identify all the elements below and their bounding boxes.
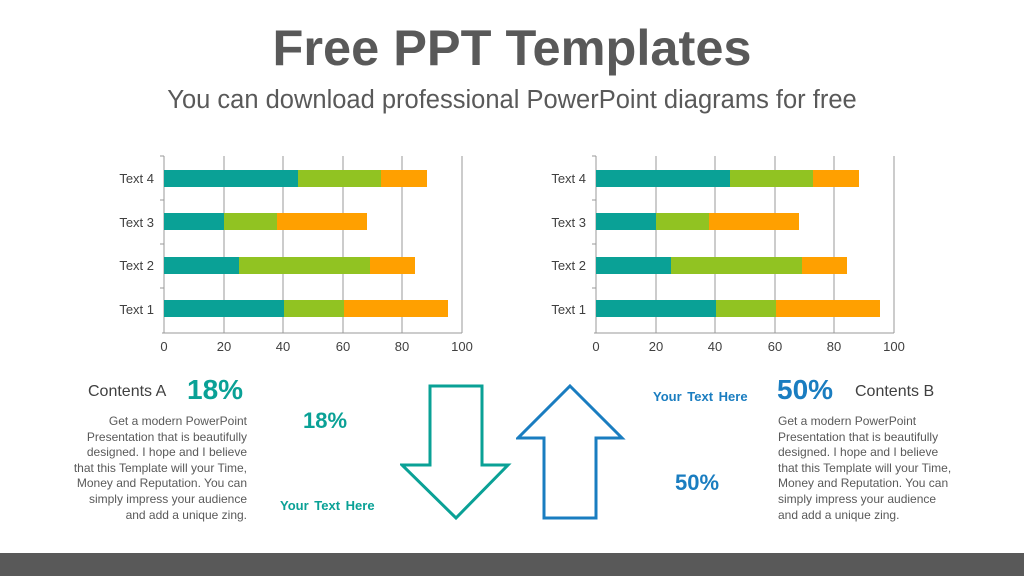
left bar chart: 0 <box>160 339 168 354</box>
left bar chart: Text 1 <box>119 302 154 317</box>
left bar chart: Text 3 <box>119 215 154 230</box>
right bar chart: Text 4 <box>551 171 586 186</box>
right bar chart: Text 1 <box>551 302 586 317</box>
label 50%: 50% <box>675 470 719 495</box>
right bar chart: 80 <box>827 339 841 354</box>
label Your Text Here right: Your Text Here <box>653 389 748 404</box>
right bar chart <box>551 156 905 354</box>
left bar chart: 20 <box>217 339 231 354</box>
percent B: 50% <box>777 374 833 405</box>
right bar chart: 20 <box>649 339 663 354</box>
percent A: 18% <box>187 374 243 405</box>
text block A: Get a modern PowerPoint Presentation that is beautifully designed. I hope and I believe that this Template will your Time, Money and Reputation. You can simply impress your audience and add a unique zing. <box>74 414 247 522</box>
right bar chart: Text 2 <box>551 258 586 273</box>
right bar chart: 60 <box>768 339 782 354</box>
text block B: Get a modern PowerPoint Presentation that is beautifully designed. I hope and I believe that this Template will your Time, Money and Reputation. You can simply impress your audience and add a unique zing. <box>778 414 951 522</box>
right bar chart: 100 <box>883 339 905 354</box>
left bar chart: Text 2 <box>119 258 154 273</box>
heading: Contents A: Contents A <box>88 383 166 400</box>
left bar chart: 40 <box>276 339 290 354</box>
left bar chart: 80 <box>395 339 409 354</box>
label 18%: 18% <box>303 408 347 433</box>
title: Free PPT Templates <box>272 19 752 76</box>
left bar chart <box>119 156 473 354</box>
right bar chart: 40 <box>708 339 722 354</box>
footer bar <box>0 553 1024 576</box>
left bar chart: Text 4 <box>119 171 154 186</box>
right bar chart: 0 <box>592 339 600 354</box>
label Your Text Here left: Your Text Here <box>280 498 375 513</box>
heading: Contents B: Contents B <box>855 383 934 400</box>
subtitle: You can download professional PowerPoint diagrams for free <box>167 86 857 114</box>
arrow down <box>400 384 512 520</box>
arrow up <box>516 384 626 520</box>
left bar chart: 100 <box>451 339 473 354</box>
left bar chart: 60 <box>336 339 350 354</box>
right bar chart: Text 3 <box>551 215 586 230</box>
